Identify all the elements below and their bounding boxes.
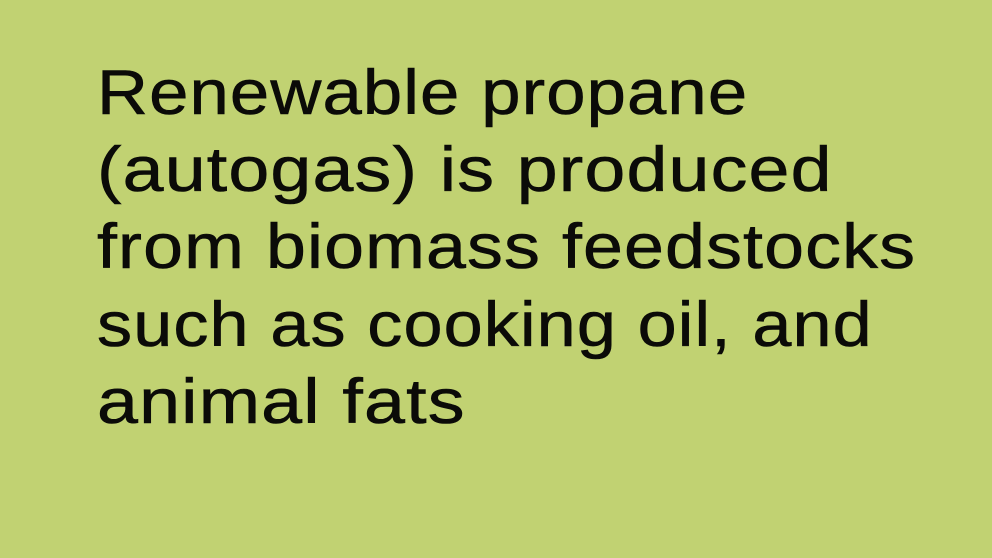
text block: renewable propane statement: Renewable propane (97, 58, 748, 128)
text block: renewable propane statement: animal fats (97, 367, 466, 437)
text block: renewable propane statement: such as cooking oil, and (97, 290, 873, 360)
text block: renewable propane statement: (autogas) is produced (97, 135, 833, 205)
text block: renewable propane statement: from biomass feedstocks (97, 212, 916, 282)
